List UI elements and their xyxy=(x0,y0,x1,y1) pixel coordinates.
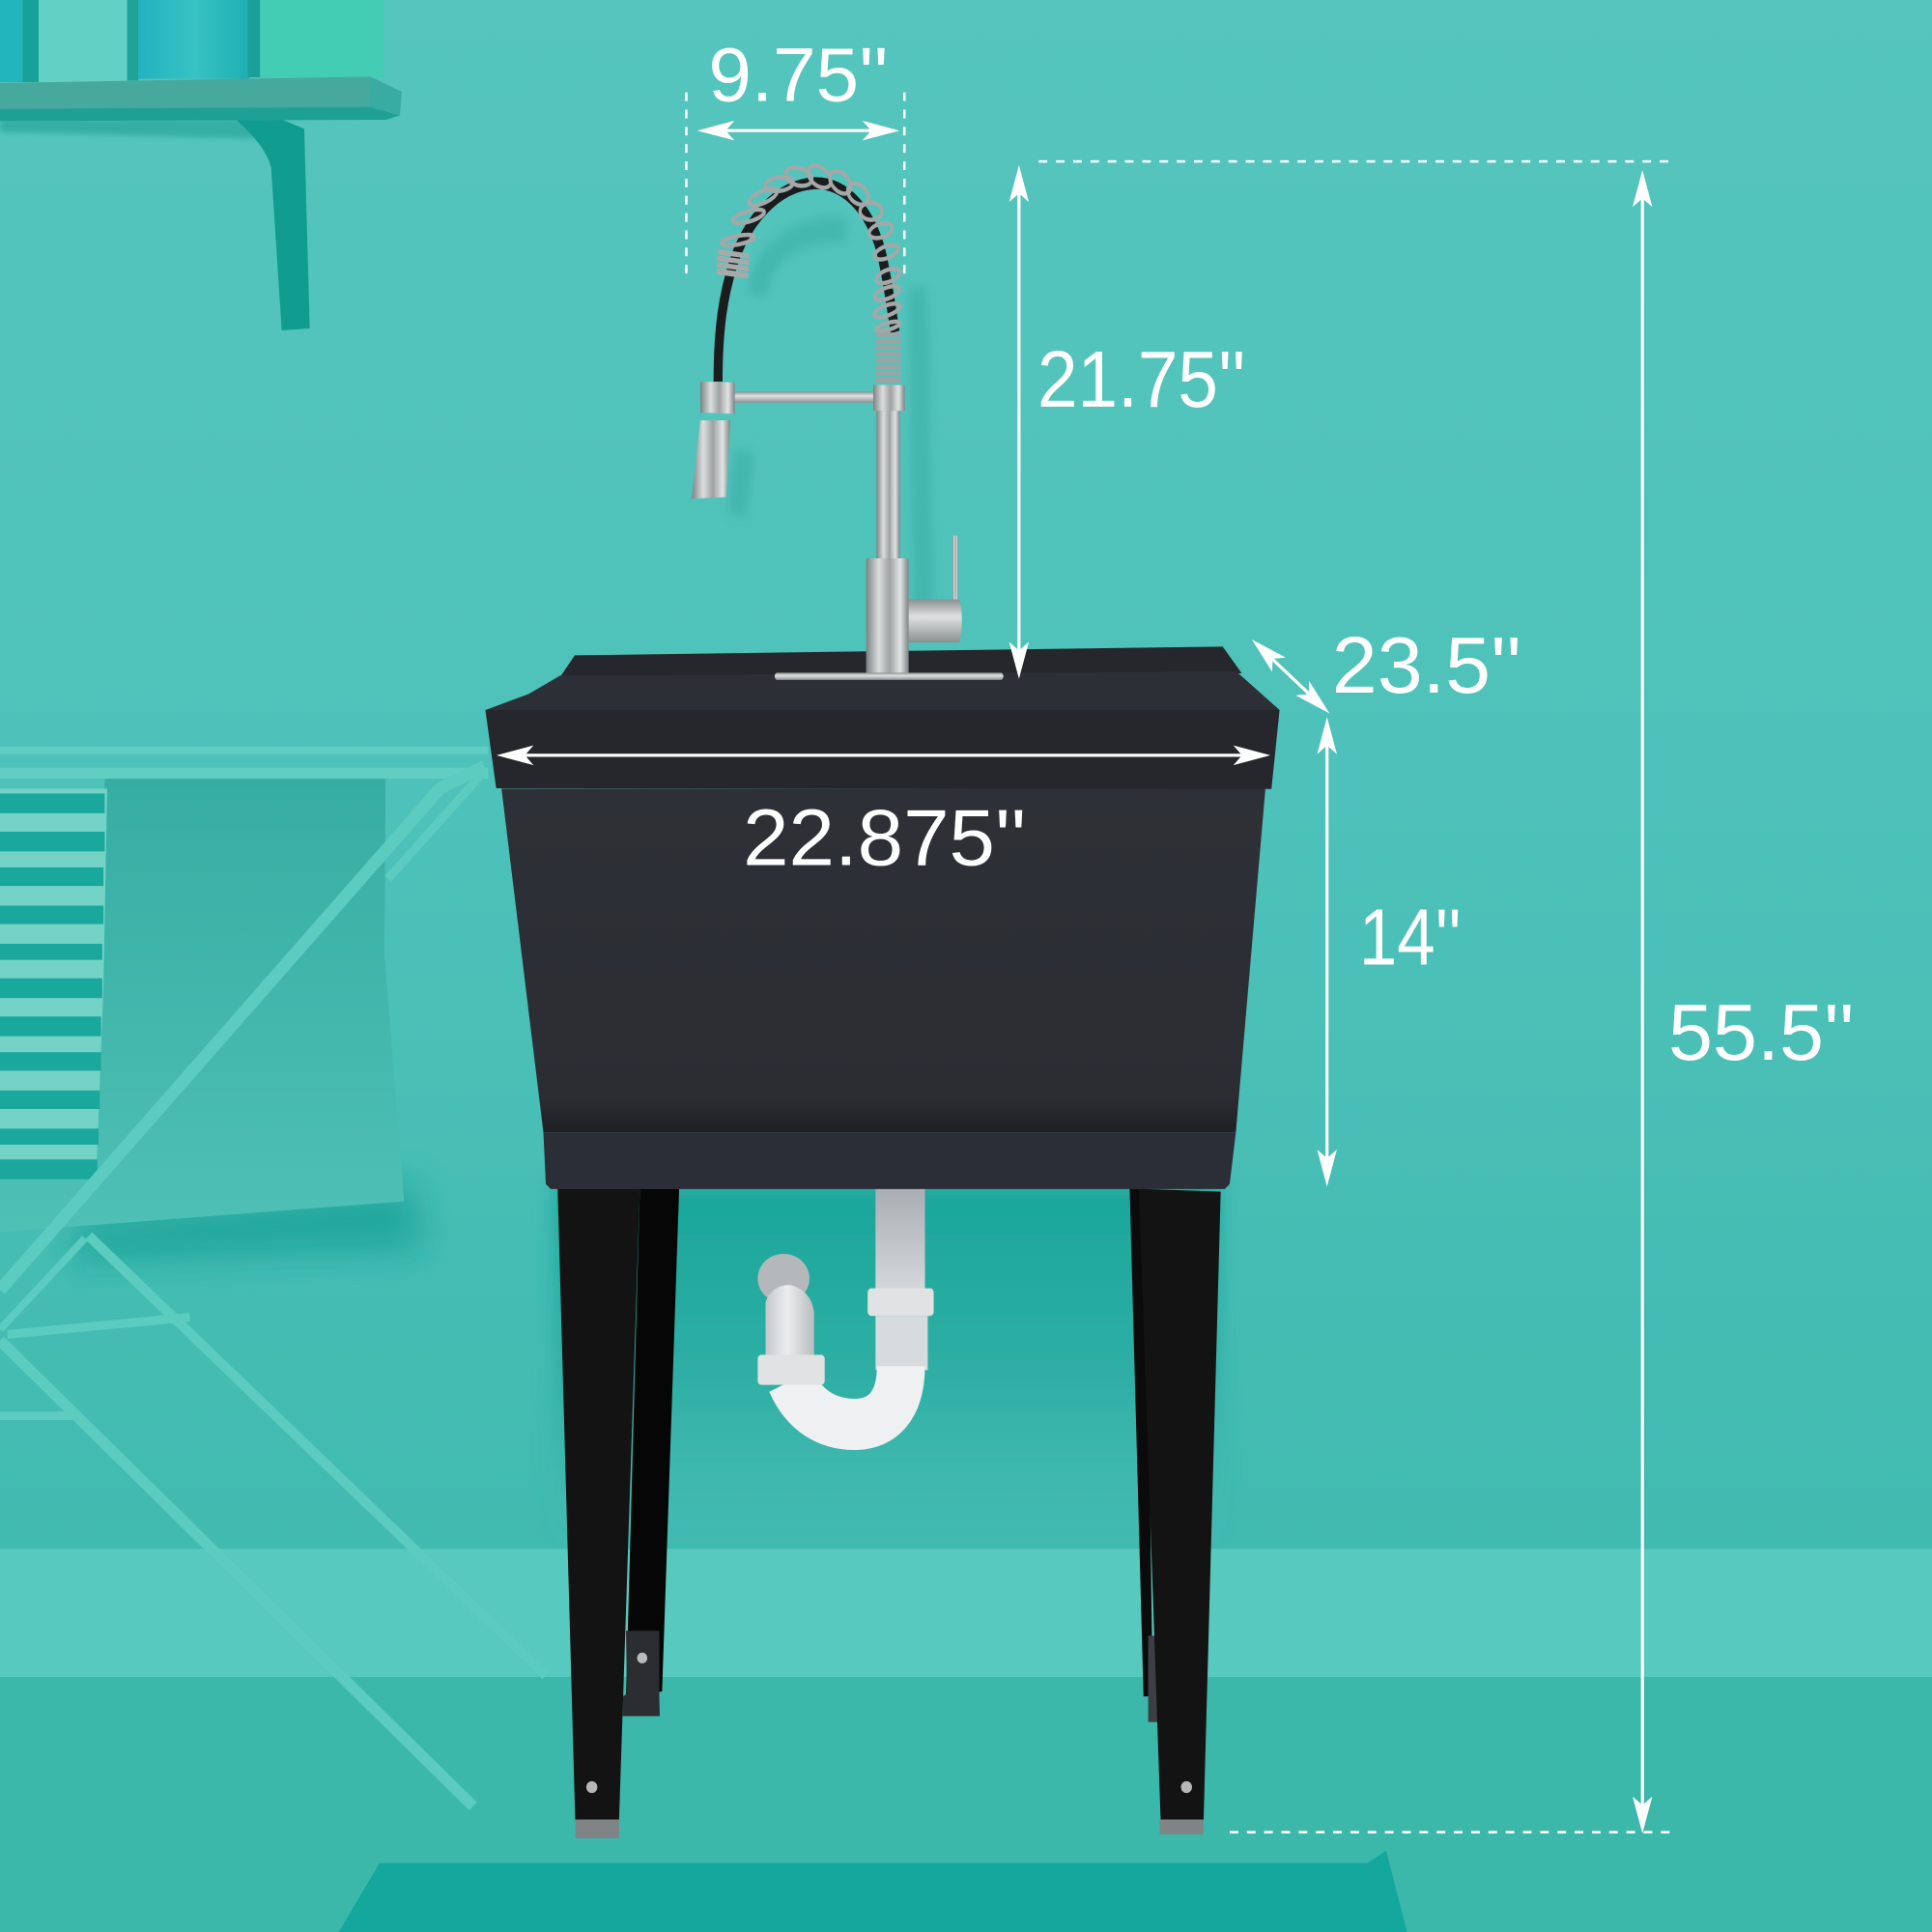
sheet shadow xyxy=(74,1182,425,1263)
dimension: total height: 55.5'' xyxy=(1668,987,1855,1077)
bottom band xyxy=(543,1132,1236,1189)
spray head xyxy=(692,420,730,498)
tub body xyxy=(501,788,1265,1132)
striped towel xyxy=(0,788,107,1179)
compact coil right xyxy=(876,332,901,383)
dashed guide lines xyxy=(686,93,1671,1833)
bottles xyxy=(0,0,384,82)
baseboard xyxy=(0,1548,1932,1677)
dimension: tub height xyxy=(1318,717,1462,1186)
drying rack xyxy=(0,747,546,1806)
stem xyxy=(876,411,900,562)
dimension: faucet height: 21.75'' xyxy=(1037,334,1246,424)
drain trap xyxy=(757,1189,934,1424)
rug xyxy=(339,1851,1407,1932)
dimension: faucet height xyxy=(1009,165,1246,679)
shadow under sink xyxy=(554,1182,1220,1548)
shelf shadow xyxy=(0,119,258,138)
deck plate xyxy=(775,672,1004,680)
dimension: faucet reach: 9.75'' xyxy=(708,32,889,118)
sink tub xyxy=(485,646,1280,1189)
dimension: faucet reach xyxy=(697,32,899,140)
dimension: total height xyxy=(1633,170,1855,1833)
faucet shadow xyxy=(737,230,924,623)
rack frame bars xyxy=(0,766,546,1806)
shelf plank xyxy=(0,76,402,121)
lever xyxy=(952,535,958,603)
handle body xyxy=(888,599,962,642)
spring coils xyxy=(721,161,901,333)
front face xyxy=(485,710,1280,789)
left rear leg xyxy=(623,1189,679,1717)
floor xyxy=(0,1677,1932,1932)
left collar xyxy=(700,382,735,413)
arm xyxy=(733,391,882,403)
right front leg xyxy=(1139,1189,1221,1834)
rear deck xyxy=(560,646,1241,677)
legs, feet and drain trap xyxy=(557,1189,1221,1838)
dimension: depth xyxy=(1245,620,1521,721)
dimension: depth: 23.5'' xyxy=(1332,620,1521,710)
right collar xyxy=(873,385,905,411)
faucet xyxy=(692,161,1004,680)
tub rim xyxy=(485,646,1280,789)
right rear leg xyxy=(1129,1189,1158,1722)
hanging sheet xyxy=(0,779,404,1233)
dimension: tub width: 22.875'' xyxy=(743,792,1026,882)
left front leg xyxy=(557,1189,639,1838)
black hose xyxy=(718,184,895,382)
shelf with bottles xyxy=(0,0,402,330)
basin interior xyxy=(485,671,1280,710)
dimension: tub width xyxy=(497,746,1270,882)
base xyxy=(867,558,909,674)
dimension: tub height: 14'' xyxy=(1359,893,1462,982)
bracket xyxy=(232,109,310,330)
compact coil left xyxy=(716,249,750,279)
